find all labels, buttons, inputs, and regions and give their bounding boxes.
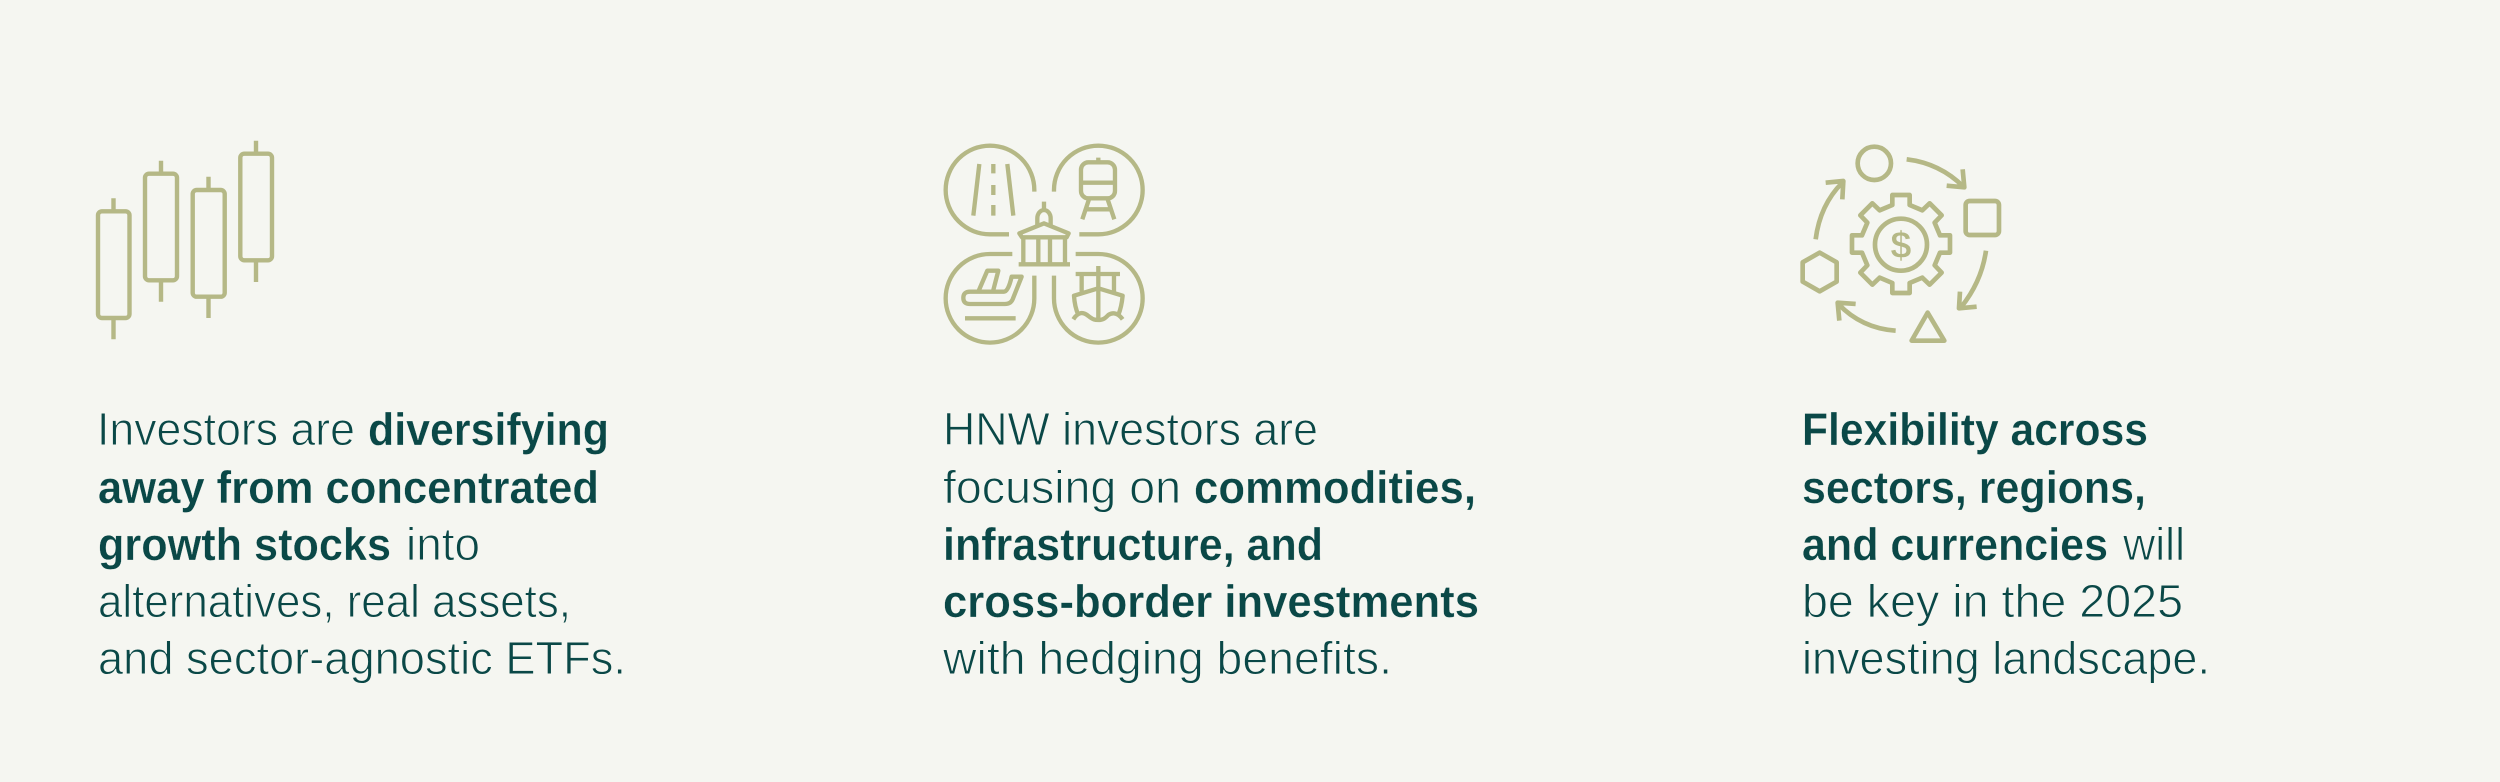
text block: flexibility: investing landscape.: [1802, 632, 2210, 684]
text block: diversifying: and sector-agnostic ETFs.: [98, 632, 626, 684]
text block: flexibility: will: [2122, 518, 2185, 570]
text block: diversifying: alternatives, real assets,: [98, 575, 571, 627]
icon: ship: [1054, 254, 1143, 343]
text block: flexibility: Flexibility across: [1802, 404, 2148, 455]
panel: flexibility: [1802, 147, 2210, 684]
panel: commodities and infrastructure: [942, 146, 1479, 684]
icon: gear with rotating shapes: [1803, 147, 1999, 341]
text block: diversifying: diversifying: [368, 404, 609, 455]
text block: diversifying: growth stocks: [98, 519, 391, 570]
text block: flexibility: be key in the 2025: [1802, 575, 2183, 627]
icon: hexagon: [1803, 253, 1837, 291]
text block: diversifying: away from concentrated: [98, 462, 599, 513]
text block: commodities: infrastructure, and: [943, 519, 1323, 570]
text block: diversifying: [97, 403, 626, 684]
text block: commodities: [942, 403, 1479, 684]
text block: commodities: commodities,: [1194, 462, 1476, 513]
arrows: [1816, 159, 1986, 331]
text block: diversifying: into: [406, 518, 480, 570]
text block: commodities: HNW investors are: [943, 403, 1318, 455]
icon: gear: [1852, 195, 1950, 293]
icon: candlestick chart: [98, 141, 272, 339]
icon: square: [1966, 201, 1999, 235]
text block: flexibility: and currencies: [1802, 519, 2108, 570]
icon: circle: [1858, 147, 1891, 180]
icon: government building: [1019, 202, 1070, 264]
text block: commodities: focusing on: [943, 461, 1181, 513]
text block: commodities: with hedging benefits.: [942, 632, 1392, 684]
icon: train: [1054, 146, 1143, 234]
text block: diversifying: Investors are: [97, 403, 355, 455]
icon: dollar sign: $: [1890, 225, 1912, 267]
icon: triangle: [1912, 313, 1944, 341]
text block: commodities: cross-border investments: [943, 576, 1479, 627]
text block: flexibility: sectors, regions,: [1802, 462, 2146, 513]
icon: road: [946, 146, 1034, 234]
text block: flexibility: [1802, 404, 2210, 684]
panel: diversifying away from growth stocks: [97, 141, 626, 684]
icon: airplane: [946, 254, 1034, 343]
icon: infrastructure clover: [946, 146, 1143, 343]
